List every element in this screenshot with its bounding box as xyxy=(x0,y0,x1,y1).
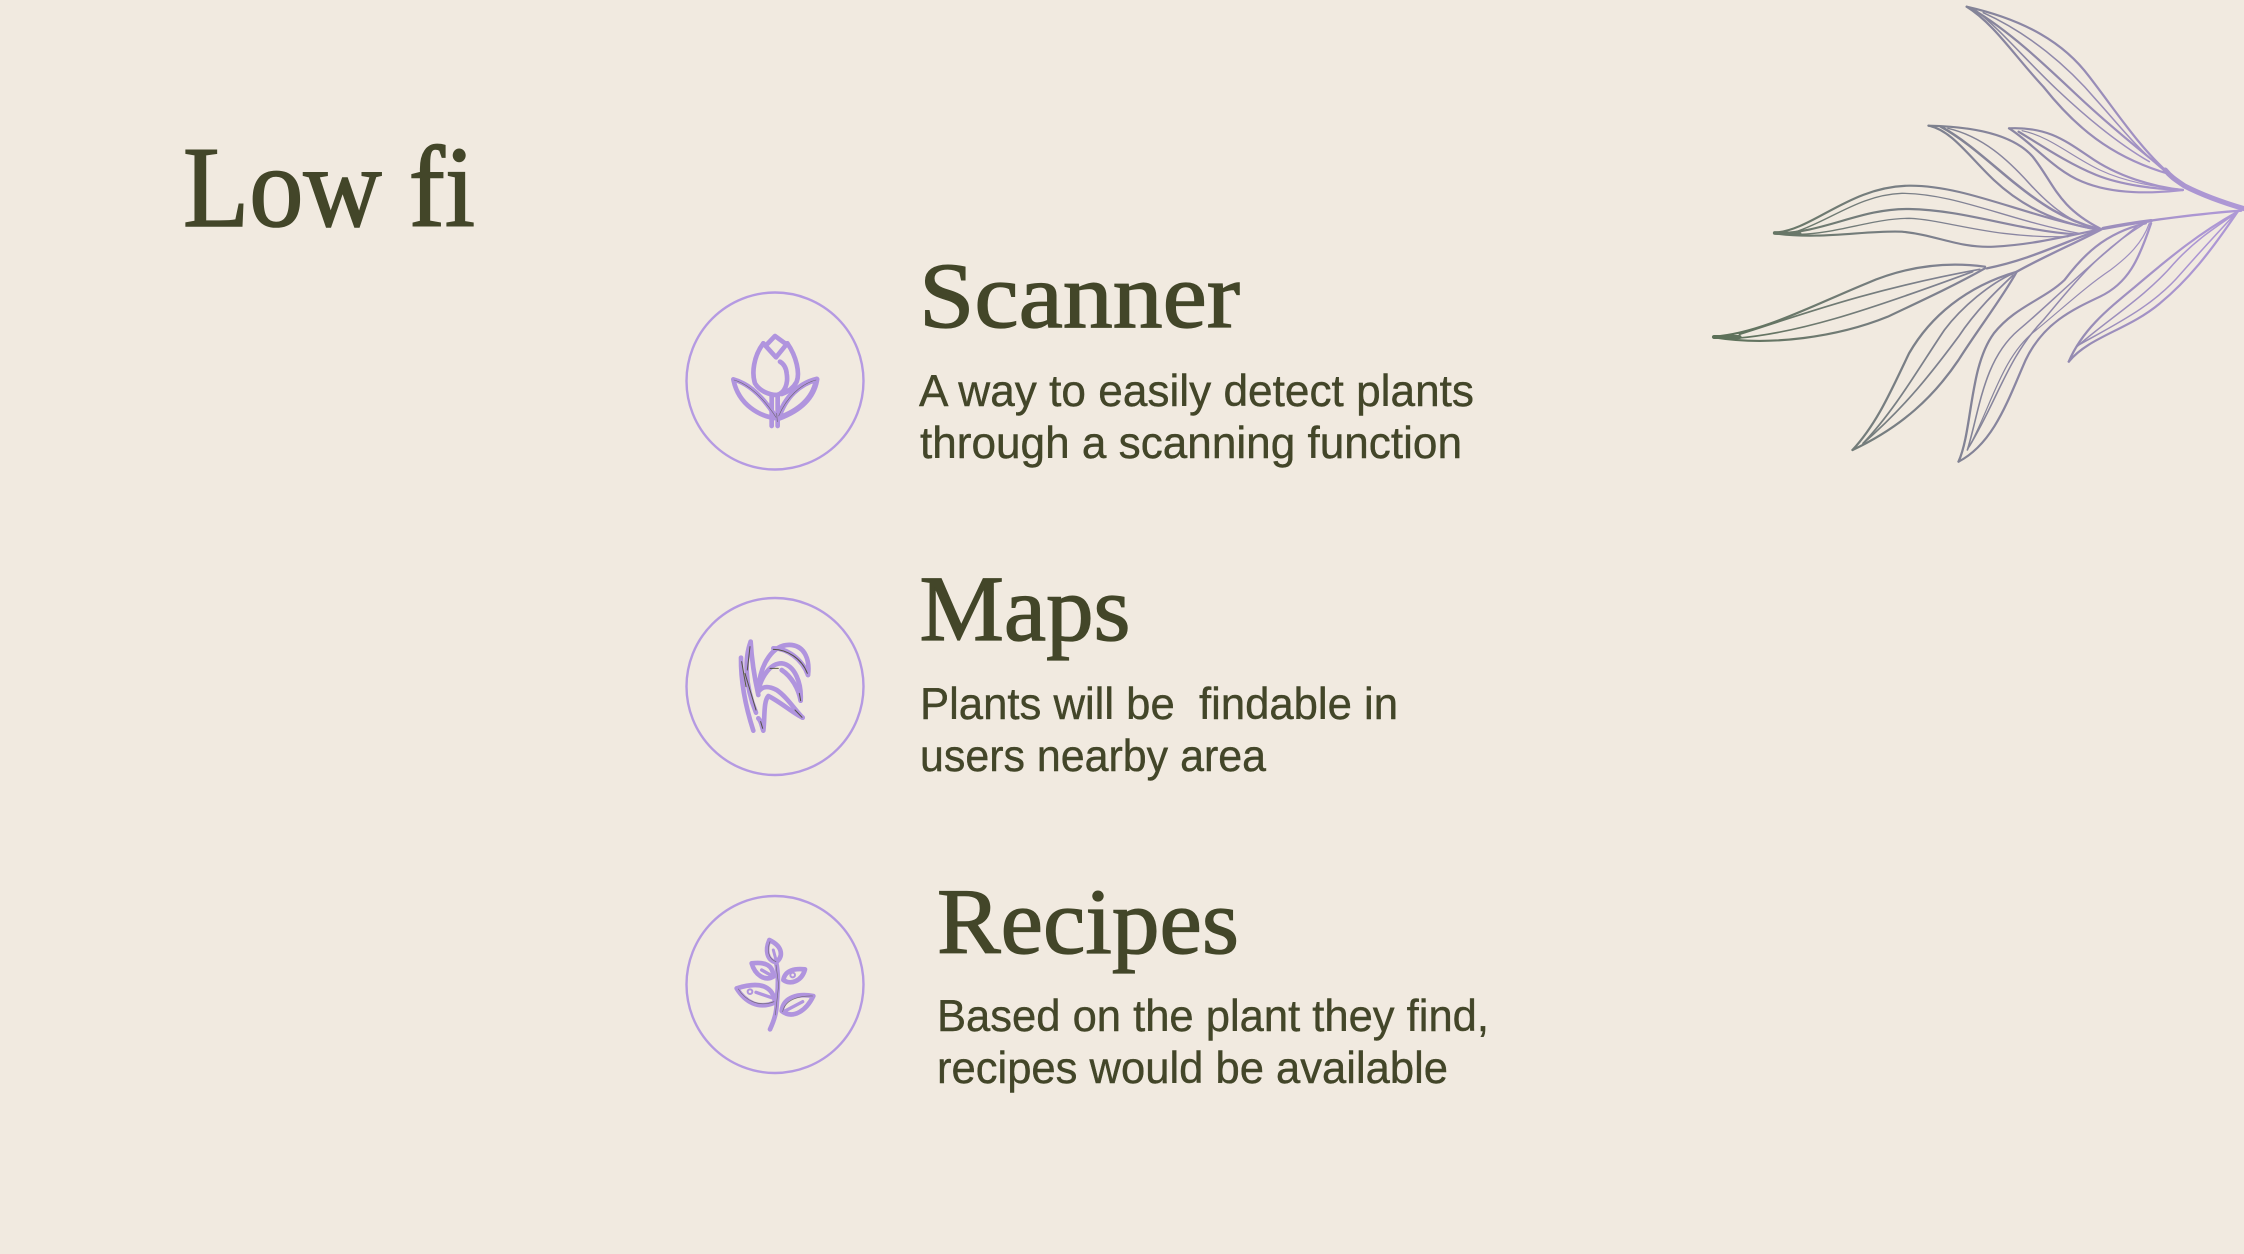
feature: Recipes xyxy=(686,871,1489,1093)
decorative leaf branch illustration xyxy=(1714,7,2244,462)
feature: Maps xyxy=(686,558,1398,781)
description: Recipes: Based on the plant they find, xyxy=(937,992,1489,1041)
icon: grass in circle xyxy=(686,598,864,775)
heading: Scanner: Scanner xyxy=(919,245,1240,348)
heading: Maps: Maps xyxy=(920,558,1130,661)
icon: tulip in circle xyxy=(686,292,864,470)
description: Scanner: A way to easily detect plants xyxy=(919,367,1474,416)
icon: herb sprig in circle xyxy=(686,896,864,1073)
description: Maps: users nearby area xyxy=(920,732,1266,781)
title: Low fi xyxy=(183,124,475,252)
description: Scanner: through a scanning function xyxy=(920,419,1462,468)
description: Recipes: recipes would be available xyxy=(937,1044,1448,1093)
description: Maps: Plants will be findable in xyxy=(920,680,1398,729)
heading: Recipes: Recipes xyxy=(937,871,1239,974)
feature: Scanner xyxy=(686,245,1474,470)
